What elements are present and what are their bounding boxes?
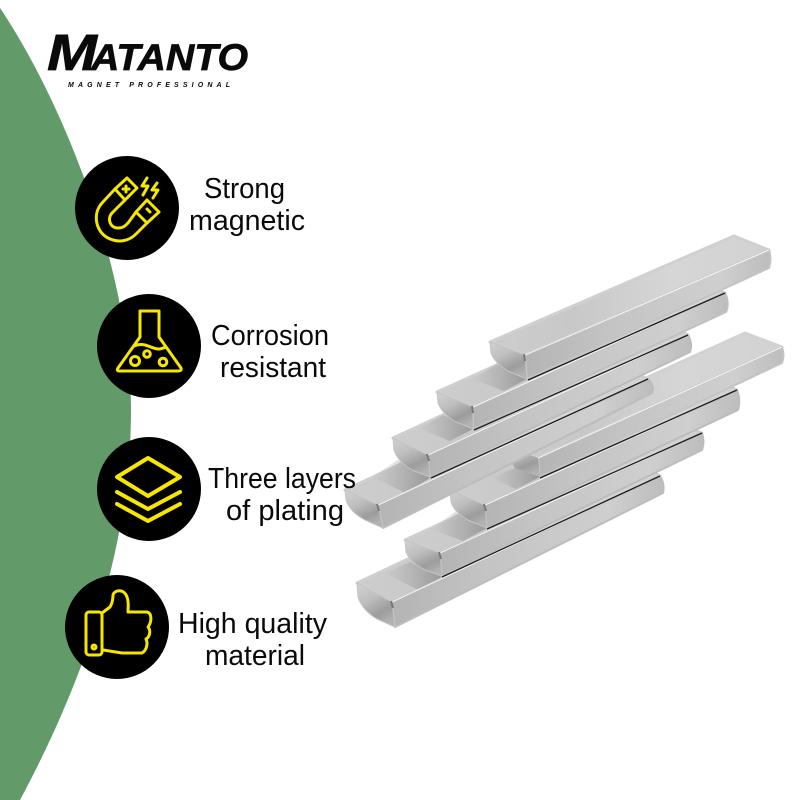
magnet F bbox=[450, 375, 739, 529]
label: three layers of plating: of plating bbox=[226, 495, 344, 527]
logo: MAGNET PROFESSIONAL bbox=[68, 82, 230, 89]
icon: horseshoe magnet bbox=[75, 156, 179, 260]
icon: layers bbox=[97, 437, 201, 541]
label: strong magnetic: magnetic bbox=[189, 205, 305, 237]
label: corrosion resistant: resistant bbox=[220, 352, 326, 384]
magnet H bbox=[357, 457, 664, 627]
icon: thumbs up bbox=[65, 575, 169, 679]
feature: high quality material bbox=[65, 575, 327, 679]
label: corrosion resistant bbox=[211, 320, 329, 384]
logo: M bbox=[47, 24, 99, 81]
magnet E bbox=[501, 333, 784, 478]
magnet B bbox=[437, 278, 728, 430]
label: strong magnetic: Strong bbox=[204, 173, 285, 205]
magnet A bbox=[490, 236, 770, 380]
magnet stack: upper group bbox=[345, 236, 770, 528]
logo bbox=[47, 24, 248, 89]
green background curve bbox=[0, 8, 131, 800]
magnet C bbox=[393, 318, 691, 478]
label: high quality material: material bbox=[205, 640, 305, 672]
label: corrosion resistant: Corrosion bbox=[211, 320, 329, 352]
magnet stack: lower group bbox=[357, 333, 784, 627]
label: high quality material bbox=[178, 608, 327, 672]
magnet G bbox=[405, 420, 704, 577]
icon: flask bbox=[97, 294, 201, 398]
label: strong magnetic bbox=[189, 173, 305, 237]
logo: ATANTO bbox=[90, 37, 248, 78]
feature: corrosion resistant bbox=[97, 294, 329, 398]
feature: three layers of plating bbox=[97, 437, 356, 541]
magnet D bbox=[345, 364, 653, 528]
label: three layers of plating: Three layers bbox=[208, 463, 356, 495]
label: three layers of plating bbox=[208, 463, 356, 527]
label: high quality material: High quality bbox=[178, 608, 327, 640]
feature: strong magnetic bbox=[75, 156, 305, 260]
